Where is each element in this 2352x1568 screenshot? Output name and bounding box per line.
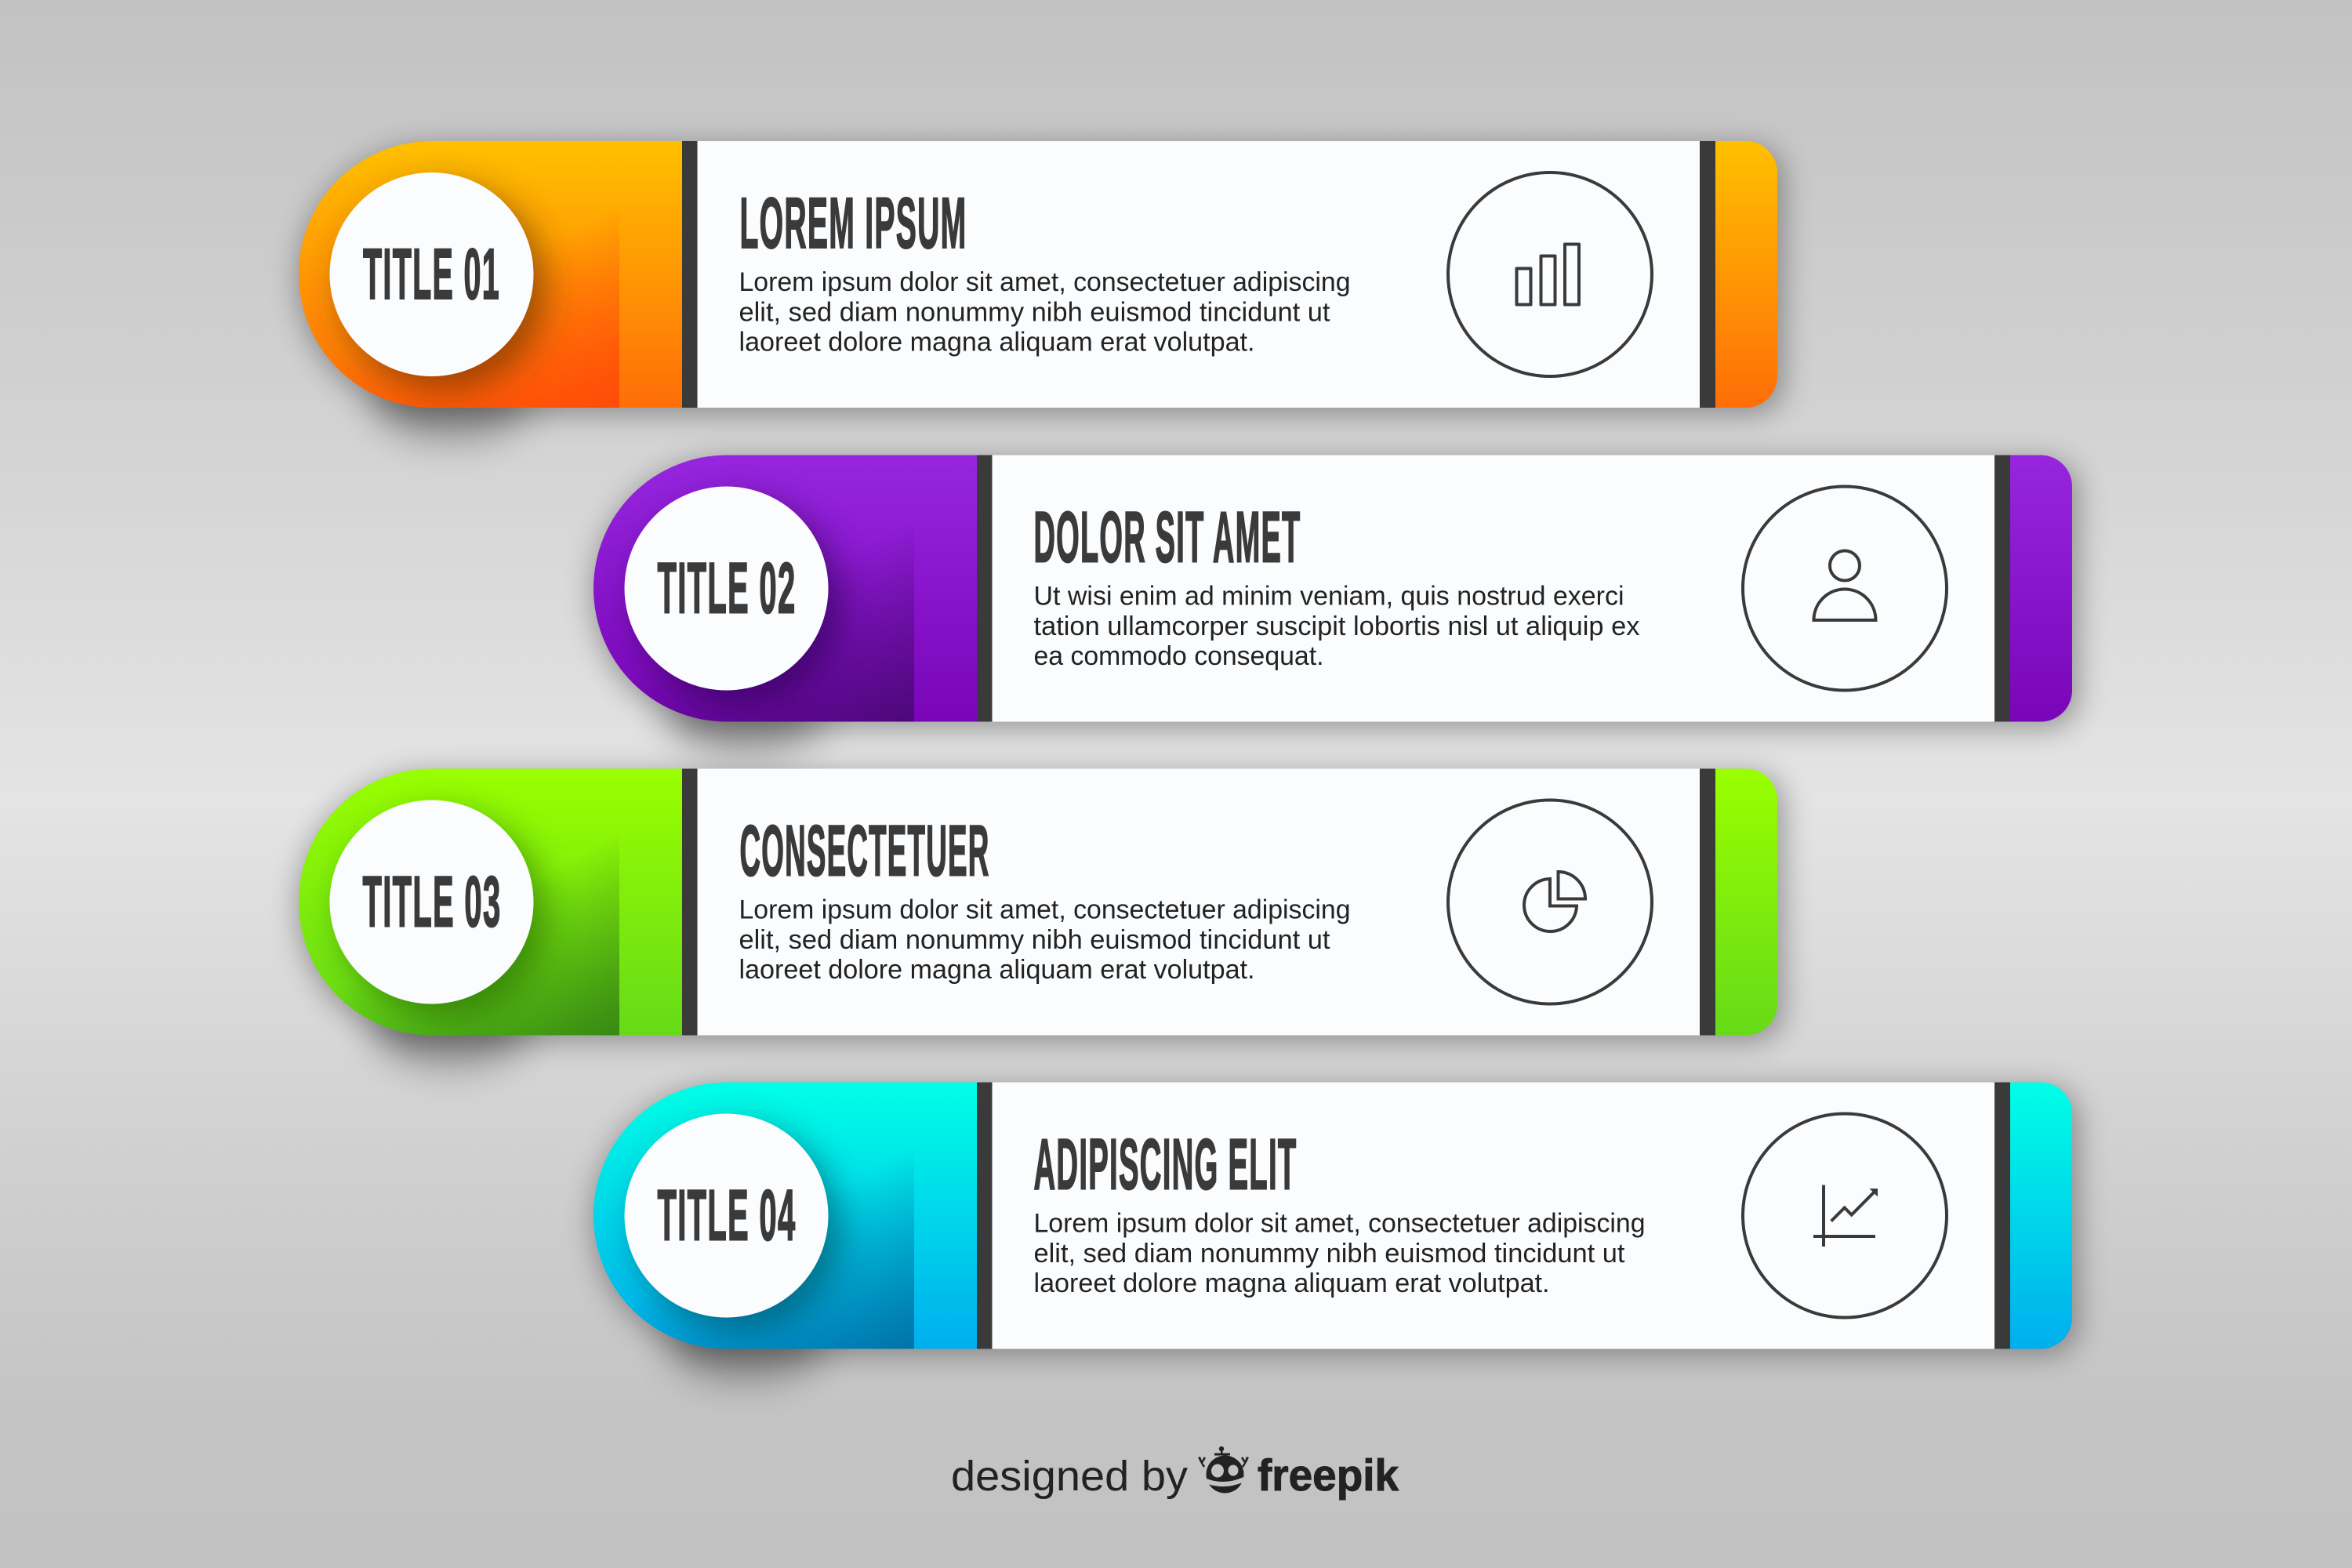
- dark bar left: [977, 1082, 993, 1348]
- dark bar right: [1994, 455, 2010, 721]
- body text: Lorem ipsum dolor sit amet, consectetuer adipiscing: [739, 267, 1350, 297]
- title circle: [624, 486, 828, 690]
- panel: step 02: [593, 455, 2078, 753]
- icon: freepik logo: [1198, 1446, 1249, 1493]
- panel: step 02: TITLE 02: [657, 549, 797, 629]
- title circle: [329, 172, 533, 376]
- freepik wordmark: freepik: [1258, 1450, 1399, 1501]
- panel: step 02: DOLOR SIT AMET: [1033, 497, 1301, 577]
- panel: step 04: TITLE 04: [657, 1176, 797, 1256]
- body text: laoreet dolore magna aliquam erat volutpat.: [1033, 1269, 1549, 1298]
- body text: [739, 895, 1350, 985]
- body text: Ut wisi enim ad minim veniam, quis nostrud exerci: [1033, 582, 1624, 612]
- body text: ea commodo consequat.: [1033, 641, 1323, 671]
- body text: tation ullamcorper suscipit lobortis nisl ut aliquip ex: [1033, 612, 1640, 641]
- panel shadow: [593, 459, 2078, 753]
- body text: elit, sed diam nonummy nibh euismod tincidunt ut: [739, 297, 1330, 327]
- panel: step 01: LOREM IPSUM: [740, 183, 967, 263]
- title circle: [329, 800, 533, 1004]
- icon: line chart: [1743, 1113, 1947, 1317]
- panel: step 03: [298, 768, 1784, 1066]
- dark bar left: [682, 141, 698, 408]
- dark bar left: [682, 768, 698, 1035]
- body text: laoreet dolore magna aliquam erat volutpat.: [739, 955, 1254, 985]
- coloured band: [299, 141, 1777, 408]
- coloured band: [593, 1082, 2072, 1348]
- coloured band: [593, 455, 2072, 721]
- body text: [1033, 582, 1640, 671]
- body text: Lorem ipsum dolor sit amet, consectetuer adipiscing: [739, 895, 1350, 925]
- panel: step 01: TITLE 01: [363, 234, 500, 314]
- coloured band: [299, 768, 1777, 1035]
- body text: laoreet dolore magna aliquam erat volutpat.: [739, 328, 1254, 358]
- white content panel: [697, 768, 1700, 1035]
- dark bar left: [977, 455, 993, 721]
- white content panel: [992, 1082, 1994, 1348]
- dark bar right: [1994, 1082, 2010, 1348]
- dark bar right: [1700, 141, 1715, 408]
- icon: bar chart: [1448, 172, 1652, 376]
- band shading: [320, 793, 619, 1035]
- band shading: [617, 479, 914, 721]
- panel shadow: [298, 146, 1784, 439]
- body text: [739, 267, 1350, 358]
- body text: elit, sed diam nonummy nibh euismod tincidunt ut: [1033, 1239, 1625, 1269]
- designed by text: designed by: [951, 1453, 1188, 1500]
- body text: Lorem ipsum dolor sit amet, consectetuer adipiscing: [1033, 1209, 1645, 1239]
- panel shadow: [298, 773, 1784, 1066]
- footer credit: [951, 1446, 1399, 1501]
- body text: elit, sed diam nonummy nibh euismod tincidunt ut: [739, 925, 1330, 955]
- panel: step 04: [593, 1082, 2078, 1380]
- panel shadow: [593, 1087, 2078, 1380]
- panel: step 04: ADIPISCING ELIT: [1033, 1124, 1297, 1204]
- band shading: [616, 1105, 914, 1348]
- panel: step 03: CONSECTETUER: [740, 811, 989, 891]
- white content panel: [992, 455, 1994, 721]
- icon: person: [1743, 486, 1947, 690]
- title circle: [624, 1113, 828, 1317]
- white content panel: [697, 141, 1700, 408]
- band shading: [320, 165, 619, 408]
- panel: step 03: TITLE 03: [362, 862, 502, 942]
- panel: step 01: [298, 141, 1784, 439]
- body text: [1033, 1209, 1645, 1298]
- icon: pie chart: [1448, 800, 1652, 1004]
- dark bar right: [1700, 768, 1715, 1035]
